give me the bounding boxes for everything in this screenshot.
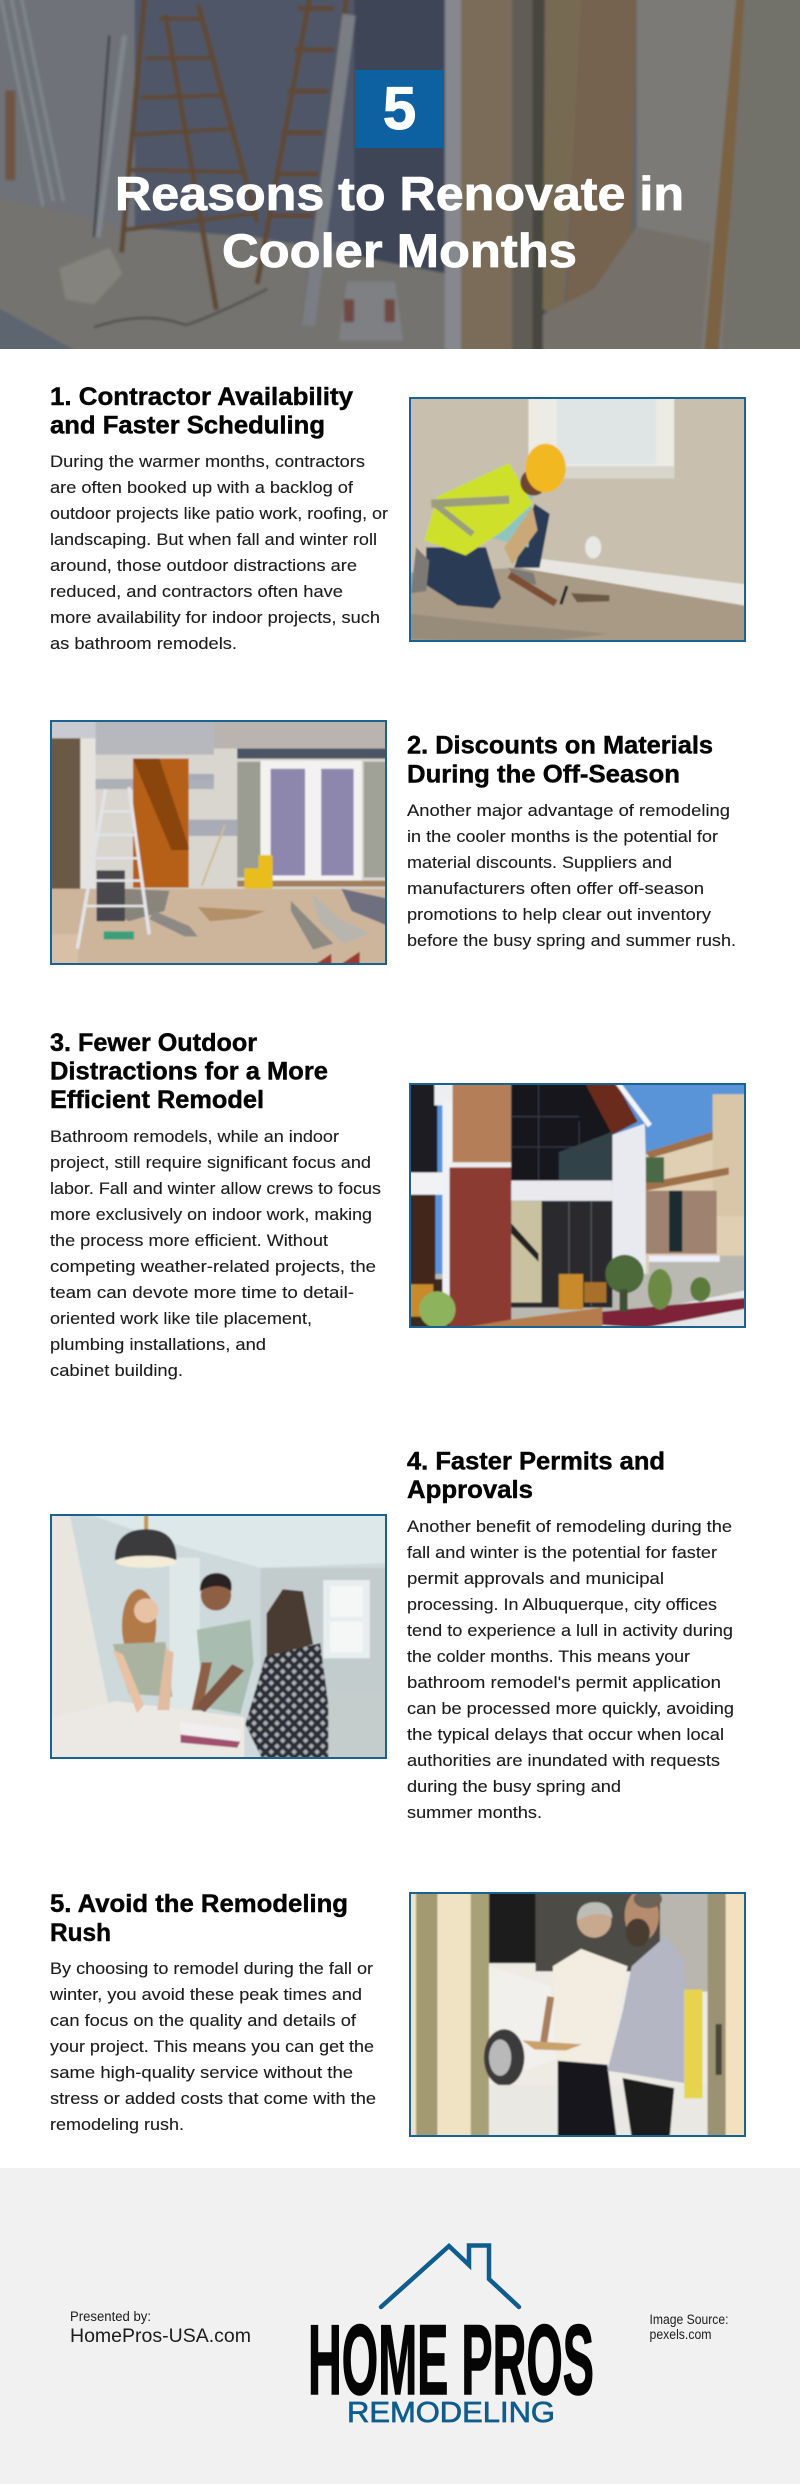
text block 4: processing. In Albuquerque, city offices xyxy=(407,1595,717,1614)
heading 2: During the Off-Season xyxy=(407,760,680,788)
text block 1: reduced, and contractors often have xyxy=(50,582,343,601)
text block 4: during the busy spring and xyxy=(407,1777,621,1796)
text block 1: are often booked up with a backlog of xyxy=(50,478,353,497)
photo: two men in a doorway reviewing plans xyxy=(402,1885,753,2144)
text block 4: fall and winter is the potential for faster xyxy=(407,1543,717,1562)
text block 5: stress or added costs that come with the xyxy=(50,2089,376,2108)
presented by: Presented by: xyxy=(70,2309,151,2324)
text block 3: cabinet building. xyxy=(50,1361,183,1380)
text block 2: material discounts. Suppliers and xyxy=(407,853,672,872)
text block 4: Another benefit of remodeling during the xyxy=(407,1517,732,1536)
text block 2: manufacturers often offer off-season xyxy=(407,879,704,898)
photo: modern two-storey house xyxy=(402,1076,753,1335)
heading 4: 4. Faster Permits and xyxy=(407,1448,665,1476)
text block 1: as bathroom remodels. xyxy=(50,634,237,653)
image source: pexels.com xyxy=(650,2327,712,2342)
text block 3: team can devote more time to detail- xyxy=(50,1283,354,1302)
text block 4: authorities are inundated with requests xyxy=(407,1751,720,1770)
text block 5: winter, you avoid these peak times and xyxy=(49,1985,362,2004)
text block 3: plumbing installations, and xyxy=(50,1335,266,1354)
logo: Home Pros Remodeling xyxy=(308,2246,594,2429)
hero photo: construction interior with ladders xyxy=(0,0,800,349)
text block 1: During the warmer months, contractors xyxy=(50,452,365,471)
photo: worker kneeling by a floor vent xyxy=(402,390,753,649)
heading 2: 2. Discounts on Materials xyxy=(407,732,713,760)
text block 3: project, still require significant focus and xyxy=(50,1153,371,1172)
heading 3 xyxy=(50,1029,328,1114)
presented by: HomePros-USA.com xyxy=(70,2325,251,2347)
text block 4: the typical delays that occur when local xyxy=(407,1725,724,1744)
text block 4: tend to experience a lull in activity during xyxy=(407,1621,733,1640)
text block 1 xyxy=(50,452,388,653)
text block 3: labor. Fall and winter allow crews to focus xyxy=(50,1179,381,1198)
text block 2: Another major advantage of remodeling xyxy=(407,801,730,820)
heading 2 xyxy=(407,732,713,788)
footer panel xyxy=(0,2168,800,2484)
photo: house exterior under construction xyxy=(43,713,394,972)
text block 2: in the cooler months is the potential for xyxy=(407,827,718,846)
heading 5: Rush xyxy=(50,1919,111,1947)
title: Cooler Months xyxy=(222,224,577,277)
text block 5: By choosing to remodel during the fall or xyxy=(50,1959,373,1978)
heading 5 xyxy=(50,1890,348,1947)
text block 1: around, those outdoor distractions are xyxy=(50,556,357,575)
text block 1: outdoor projects like patio work, roofing, or xyxy=(50,504,388,523)
photo: three people talking at a kitchen counter xyxy=(43,1507,394,1766)
image source: Image Source: xyxy=(650,2312,728,2327)
number badge: 5 xyxy=(383,75,416,142)
title xyxy=(115,167,684,277)
text block 2: promotions to help clear out inventory xyxy=(407,905,712,924)
hero banner xyxy=(0,0,800,367)
panel: reason 2 xyxy=(43,713,736,972)
text block 3: competing weather-related projects, the xyxy=(50,1257,376,1276)
text block 3: more exclusively on indoor work, making xyxy=(50,1205,372,1224)
heading 1: 1. Contractor Availability xyxy=(50,383,353,411)
text block 1: more availability for indoor projects, such xyxy=(50,608,380,627)
panel: reason 5 xyxy=(49,1885,753,2144)
heading 4: Approvals xyxy=(407,1476,533,1504)
text block 4: can be processed more quickly, avoiding xyxy=(407,1699,734,1718)
text block 3: Bathroom remodels, while an indoor xyxy=(50,1127,339,1146)
text block 4: the colder months. This means your xyxy=(407,1647,690,1666)
heading 1 xyxy=(50,383,353,440)
text block 4: summer months. xyxy=(407,1803,542,1822)
text block 5: remodeling rush. xyxy=(50,2115,184,2134)
heading 3: Distractions for a More xyxy=(50,1058,328,1086)
heading 3: 3. Fewer Outdoor xyxy=(50,1029,257,1057)
text block 4: bathroom remodel's permit application xyxy=(407,1673,721,1692)
heading 5: 5. Avoid the Remodeling xyxy=(50,1890,348,1918)
text block 3: the process more efficient. Without xyxy=(50,1231,328,1250)
text block 5: can focus on the quality and details of xyxy=(50,2011,356,2030)
icon: house roof xyxy=(381,2246,519,2307)
logo: Home Pros Remodeling: REMODELING xyxy=(347,2397,555,2429)
presented by xyxy=(70,2309,251,2347)
number badge xyxy=(355,70,444,148)
heading 3: Efficient Remodel xyxy=(50,1086,264,1114)
heading 4 xyxy=(407,1448,665,1504)
text block 1: landscaping. But when fall and winter roll xyxy=(50,530,377,549)
text block 3 xyxy=(50,1127,381,1380)
image source xyxy=(650,2312,728,2342)
title: Reasons to Renovate in xyxy=(115,167,684,220)
panel: reason 1 xyxy=(50,383,753,653)
heading 1: and Faster Scheduling xyxy=(50,412,325,440)
panel: reason 3 xyxy=(50,1029,753,1380)
text block 2: before the busy spring and summer rush. xyxy=(407,931,736,950)
text block 4 xyxy=(407,1517,734,1822)
text block 5: your project. This means you can get the xyxy=(50,2037,374,2056)
panel: reason 4 xyxy=(43,1448,734,1822)
text block 4: permit approvals and municipal xyxy=(407,1569,664,1588)
text block 5: same high-quality service without the xyxy=(50,2063,353,2082)
text block 3: oriented work like tile placement, xyxy=(50,1309,312,1328)
text block 2 xyxy=(407,801,736,950)
text block 5 xyxy=(49,1959,376,2134)
